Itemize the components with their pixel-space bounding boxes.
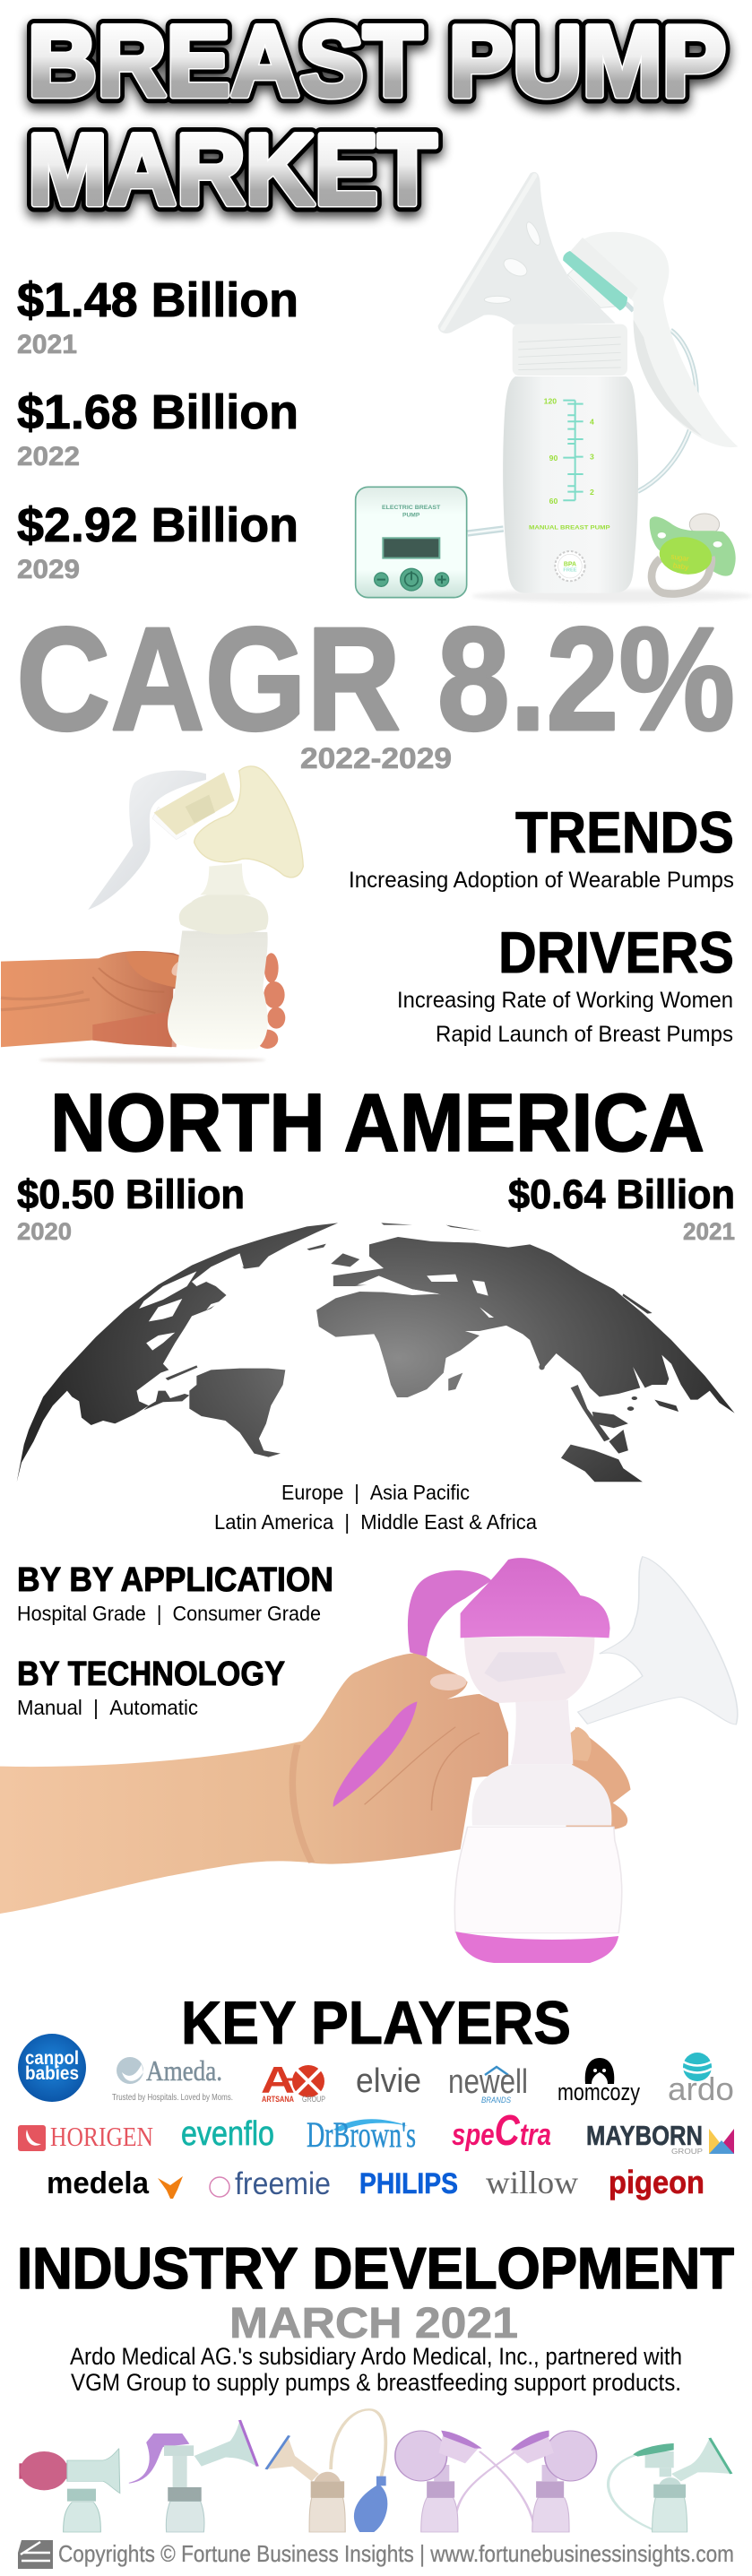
bottle measurement scale: 60 bbox=[549, 497, 558, 506]
stat 2029 bbox=[17, 498, 298, 584]
logo: medela: medela bbox=[47, 2166, 150, 2200]
logo: willow: willow bbox=[486, 2165, 578, 2200]
bottle measurement scale: 2 bbox=[590, 488, 594, 497]
title bbox=[28, 5, 726, 231]
logo: horigen bbox=[18, 2121, 153, 2152]
title: BREAST PUMP bbox=[28, 11, 726, 123]
photo: hand holding pink breast pump bbox=[0, 1557, 738, 1963]
pump: green bbox=[609, 2438, 731, 2532]
photo: hand holding breast pump with milk bbox=[1, 766, 303, 1063]
bottle measurement scale: 120 bbox=[544, 396, 557, 405]
north america 2020 value: $0.50 Billion bbox=[17, 1171, 245, 1217]
trend item: Increasing Adoption of Wearable Pumps bbox=[349, 868, 734, 893]
pacifier: sugar bbox=[670, 552, 689, 563]
logo: artsana: ARTSANA bbox=[262, 2095, 294, 2104]
drivers section: DRIVERS bbox=[498, 920, 734, 985]
electric pump unit bbox=[356, 487, 467, 598]
logo: newell brands: newell bbox=[448, 2063, 528, 2101]
logo: freemie: freemie bbox=[235, 2166, 331, 2201]
bottle measurement scale: 3 bbox=[590, 453, 594, 462]
pump illustrations row bbox=[19, 2409, 731, 2532]
world map globe bbox=[17, 1223, 735, 1482]
segment: by technology: BY TECHNOLOGY bbox=[17, 1655, 285, 1693]
segment: by technology: Manual | Automatic bbox=[17, 1696, 198, 1719]
logo: artsana: A bbox=[261, 2059, 295, 2101]
bottle measurement scale: 4 bbox=[590, 418, 594, 427]
logo: evenflo: evenflo bbox=[181, 2115, 274, 2153]
BPA free badge bbox=[555, 551, 585, 581]
title: MARKET bbox=[28, 114, 437, 226]
other regions list: Europe | Asia Pacific bbox=[281, 1481, 470, 1504]
development description bbox=[70, 2343, 682, 2396]
logo: canpol babies: canpol bbox=[25, 2048, 79, 2069]
logo: ardo bbox=[668, 2053, 734, 2107]
logo: momcozy: momcozy bbox=[558, 2079, 640, 2105]
electric pump unit: ELECTRIC BREAST bbox=[382, 505, 440, 511]
development date: MARCH 2021 bbox=[229, 2300, 518, 2347]
logo: ameda bbox=[112, 2054, 233, 2103]
title: MARKET bbox=[28, 114, 437, 226]
logo: pigeon: pigeon bbox=[609, 2164, 704, 2200]
development description: VGM Group to supply pumps & breastfeeding support products. bbox=[71, 2369, 681, 2396]
BPA free badge: FREE bbox=[563, 567, 577, 573]
north america 2021 value: $0.64 Billion bbox=[508, 1171, 735, 1217]
stat 2029: 2029 bbox=[17, 555, 80, 584]
other regions list bbox=[214, 1481, 537, 1534]
forecast period: 2022-2029 bbox=[300, 742, 452, 774]
north america 2020 value bbox=[17, 1171, 245, 1245]
other regions list: Latin America | Middle East & Africa bbox=[214, 1510, 537, 1534]
driver item 1: Increasing Rate of Working Women bbox=[397, 988, 733, 1013]
logo: elvie: elvie bbox=[356, 2062, 421, 2100]
stat 2029: $2.92 Billion bbox=[17, 498, 298, 552]
logo: canpol babies: babies bbox=[25, 2063, 79, 2084]
logo: artsana bbox=[261, 2059, 325, 2104]
bottle measurement scale bbox=[529, 396, 610, 532]
stat 2022: 2022 bbox=[17, 442, 80, 471]
illustration: manual and electric breast pump bbox=[356, 172, 752, 602]
north america heading: NORTH AMERICA bbox=[50, 1077, 704, 1169]
segment: by application: BY BY APPLICATION bbox=[17, 1561, 333, 1599]
north america 2021 value: 2021 bbox=[683, 1218, 735, 1245]
stat 2022 bbox=[17, 385, 298, 471]
driver item 2: Rapid Launch of Breast Pumps bbox=[436, 1022, 733, 1047]
title: MARKET bbox=[28, 114, 437, 226]
title: MARKET bbox=[28, 119, 437, 231]
pump: pink bulb bbox=[19, 2449, 120, 2532]
north america 2021 value bbox=[508, 1171, 735, 1245]
logo: spectra: speCtra bbox=[452, 2107, 551, 2155]
title: BREAST PUMP bbox=[28, 5, 726, 117]
stat 2021 bbox=[17, 273, 298, 359]
stat 2021: $1.48 Billion bbox=[17, 273, 298, 327]
bottle measurement scale: MANUAL BREAST PUMP bbox=[529, 525, 610, 532]
logo: horigen: HORIGEN bbox=[50, 2121, 153, 2152]
pump: purple lever bbox=[128, 2420, 257, 2532]
segment: by application bbox=[17, 1561, 333, 1625]
logo: mayborn group: GROUP bbox=[671, 2148, 703, 2156]
pump: beige with blue bulb bbox=[266, 2409, 387, 2532]
icon: fortune business insights logo bbox=[18, 2540, 53, 2569]
logo: artsana: GROUP bbox=[302, 2095, 325, 2104]
trends section: TRENDS bbox=[515, 800, 734, 865]
logo: dr browns: DrBrown's bbox=[307, 2114, 416, 2155]
segment: by technology bbox=[17, 1655, 285, 1719]
logo: ameda: Trusted by Hospitals. Loved by Moms. bbox=[112, 2093, 233, 2103]
stat 2021: 2021 bbox=[17, 330, 77, 359]
bottle measurement scale: 90 bbox=[549, 454, 558, 462]
pacifier bbox=[650, 514, 736, 594]
key players heading: KEY PLAYERS bbox=[181, 1989, 571, 2057]
market size stats bbox=[17, 273, 298, 584]
logo: philips: PHILIPS bbox=[359, 2167, 458, 2200]
development description: Ardo Medical AG.'s subsidiary Ardo Medical, Inc., partnered with bbox=[70, 2343, 682, 2370]
title: BREAST PUMP bbox=[28, 5, 726, 117]
pump: double purple bbox=[395, 2431, 597, 2532]
north america 2020 value: 2020 bbox=[17, 1218, 72, 1245]
electric pump unit: PUMP bbox=[402, 512, 420, 518]
logo: ameda: Ameda. bbox=[146, 2054, 222, 2087]
logo: momcozy bbox=[558, 2058, 640, 2105]
title: BREAST PUMP bbox=[28, 5, 726, 117]
logo: mayborn group: MAYBORN bbox=[586, 2120, 703, 2151]
BPA free badge: BPA bbox=[564, 561, 576, 567]
drivers section bbox=[397, 920, 734, 1047]
logo: ardo: ardo bbox=[668, 2070, 734, 2107]
key player logos bbox=[18, 2034, 734, 2201]
logo: newell brands: BRANDS bbox=[481, 2096, 511, 2105]
segment: by application: Hospital Grade | Consumer Grade bbox=[17, 1602, 321, 1625]
trends section bbox=[349, 800, 734, 893]
logo: canpol babies bbox=[18, 2034, 86, 2102]
pacifier: baby bbox=[672, 561, 689, 572]
stat 2022: $1.68 Billion bbox=[17, 385, 298, 439]
industry development heading: INDUSTRY DEVELOPMENT bbox=[17, 2235, 734, 2301]
